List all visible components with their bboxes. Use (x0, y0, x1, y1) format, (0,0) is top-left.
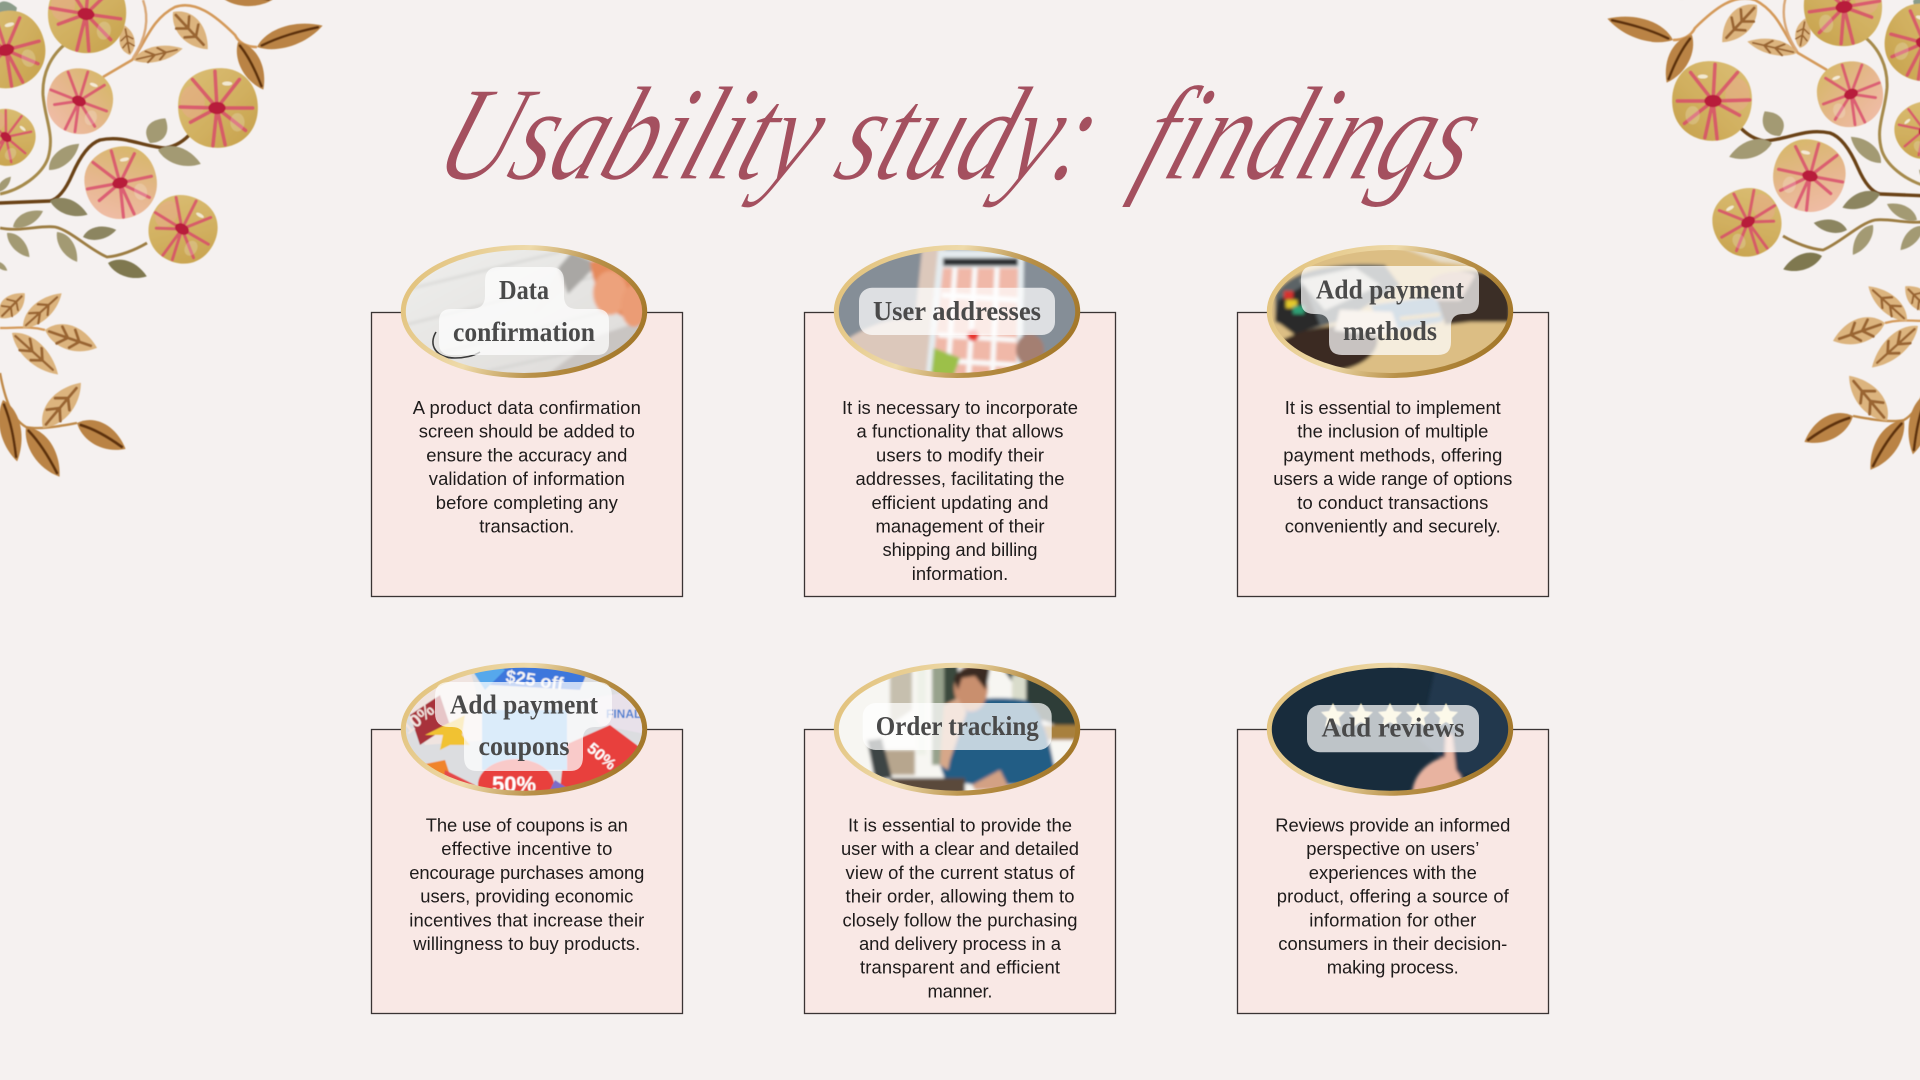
panel: user addresses (804, 245, 1116, 596)
heading: methods (1343, 316, 1437, 346)
body text: payment methods, offering (1283, 444, 1502, 465)
body text: users to modify their (876, 444, 1044, 465)
body text: a functionality that allows (856, 421, 1064, 442)
floral decoration: top left (0, 0, 326, 482)
body text: conveniently and securely. (1285, 516, 1501, 536)
body text: users a wide range of options (1273, 468, 1512, 489)
heading (453, 275, 595, 347)
image ring (836, 665, 1078, 793)
body text: It is essential to provide the (848, 814, 1072, 836)
panel background (372, 312, 682, 596)
heading pill (439, 267, 609, 355)
body text: users, providing economic (420, 886, 633, 907)
heading: Order tracking (876, 711, 1039, 741)
panel: data confirmation (372, 245, 682, 596)
heading (1316, 274, 1464, 346)
heading: confirmation (453, 317, 595, 347)
body text: before completing any (436, 492, 619, 513)
image ring (1269, 248, 1511, 376)
body text: to conduct transactions (1297, 492, 1488, 513)
body text: user with a clear and detailed (841, 838, 1079, 859)
body text: transparent and efficient (860, 957, 1060, 978)
body text: willingness to buy products. (412, 933, 640, 954)
heading: User addresses (873, 296, 1041, 326)
coupon label: 25 off: $25 off (504, 666, 566, 694)
body text: Reviews provide an informed (1275, 814, 1510, 836)
body text: The use of coupons is an (426, 814, 628, 836)
body text: closely follow the purchasing (842, 909, 1078, 930)
panel: add payment methods (1238, 245, 1548, 596)
body text: effective incentive to (441, 838, 612, 859)
heading pill (863, 703, 1052, 750)
heading: Add reviews (1322, 713, 1464, 743)
body text: view of the current status of (846, 862, 1075, 883)
body text: addresses, facilitating the (856, 468, 1064, 489)
body text: information for other (1309, 909, 1476, 930)
title: Usability study: findings (419, 60, 1503, 208)
body text: manner. (928, 980, 992, 1001)
body text (1273, 397, 1512, 536)
image: five stars and pointing hand (1272, 668, 1508, 791)
panel background (1238, 312, 1548, 596)
body text: encourage purchases among (409, 862, 644, 883)
coupon label: 50 percent: 50% (492, 772, 536, 797)
image ring (403, 665, 645, 793)
body text: ensure the accuracy and (426, 444, 627, 465)
body text: consumers in their decision- (1278, 933, 1507, 954)
heading: Data (499, 275, 549, 305)
floral decoration: top right (1604, 0, 1920, 475)
coupon label: final: FINAL (606, 707, 641, 721)
panel background (804, 312, 1116, 596)
image: card payment (1272, 250, 1508, 373)
body text (841, 814, 1079, 1001)
panel: add reviews (1238, 660, 1548, 1014)
panel: order tracking (804, 660, 1116, 1014)
body text (842, 397, 1078, 584)
body text: the inclusion of multiple (1297, 421, 1488, 442)
image ring (403, 248, 645, 376)
body text: screen should be added to (419, 421, 635, 442)
heading pill (859, 288, 1055, 335)
image: phone with map (838, 250, 1076, 373)
image ring (1269, 665, 1511, 793)
body text: shipping and billing (882, 539, 1038, 560)
coupon label: 50 off: 50% (583, 740, 619, 774)
image: coupons collage (406, 668, 642, 791)
body text (1275, 814, 1510, 978)
body text: validation of information (429, 468, 625, 489)
body text: efficient updating and (872, 492, 1048, 513)
heading (450, 689, 598, 761)
body text: perspective on users’ (1306, 838, 1479, 859)
heading: Add payment (1316, 274, 1464, 304)
image: man on phone at desk (838, 668, 1076, 791)
heading pill (435, 682, 612, 771)
body text: It is essential to implement (1285, 397, 1501, 418)
body text (413, 397, 641, 536)
panel background (1238, 730, 1548, 1014)
body text: incentives that increase their (409, 909, 644, 930)
coupon label: 10 percent: 10% (398, 700, 438, 738)
body text: making process. (1327, 957, 1459, 978)
heading: Add payment (450, 689, 598, 719)
body text: product, offering a source of (1277, 886, 1510, 907)
image: pen writing on paper (406, 250, 642, 373)
body text: information. (912, 563, 1008, 584)
heading pill (1301, 266, 1479, 355)
image ring (836, 248, 1078, 376)
body text: transaction. (479, 516, 574, 536)
body text (409, 814, 644, 954)
body text: management of their (876, 516, 1044, 536)
heading pill (1307, 705, 1479, 752)
body text: their order, allowing them to (846, 886, 1074, 907)
body text: and delivery process in a (859, 933, 1062, 954)
body text: experiences with the (1309, 862, 1477, 883)
panel: add payment coupons (372, 660, 682, 1014)
panel background (804, 730, 1116, 1014)
heading: coupons (478, 731, 570, 761)
panel background (372, 730, 682, 1014)
body text: It is necessary to incorporate (842, 397, 1078, 418)
body text: A product data confirmation (413, 397, 641, 418)
